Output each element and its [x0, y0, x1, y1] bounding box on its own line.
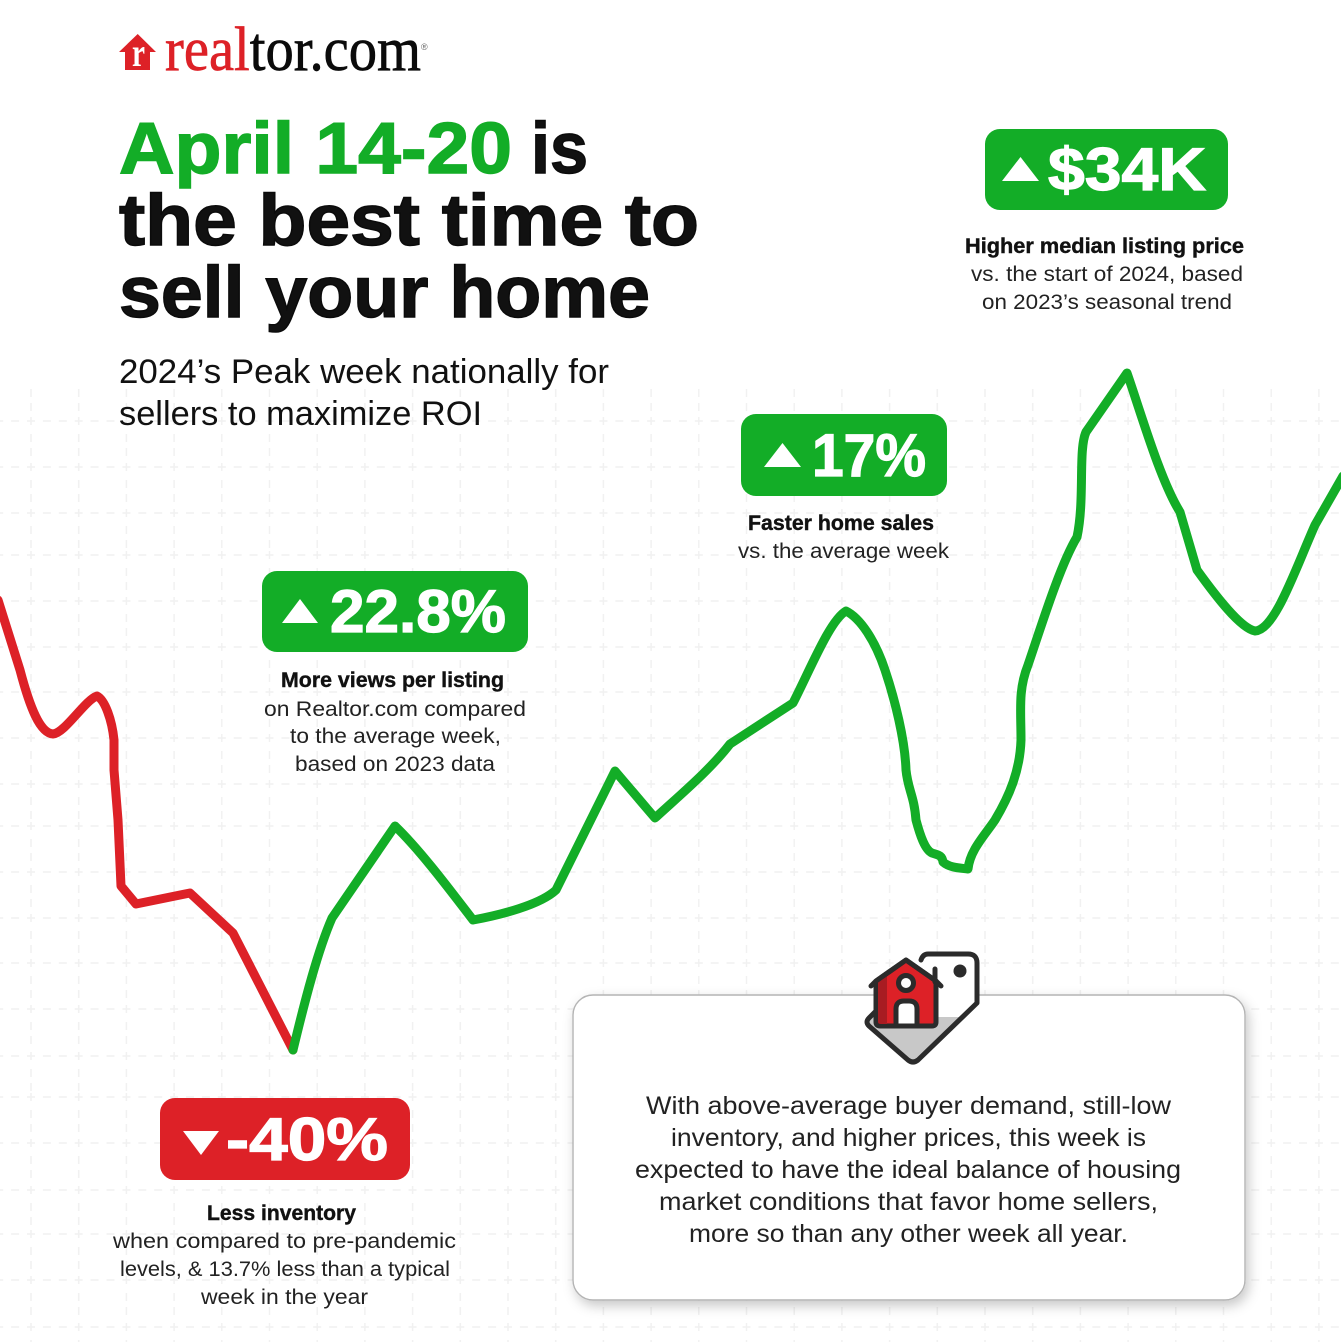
stat: -40% — [112, 1098, 456, 1309]
title — [119, 109, 699, 333]
caption: More views per listing — [281, 669, 504, 692]
caption — [965, 235, 1244, 314]
callout text: inventory, and higher prices, this week is — [671, 1124, 1146, 1152]
caption: on Realtor.com compared — [264, 698, 526, 721]
caption: based on 2023 data — [295, 753, 495, 776]
subtitle: sellers to maximize ROI — [119, 395, 482, 433]
badge: -40% — [226, 1106, 388, 1173]
title: is — [531, 109, 588, 189]
stat: $34K — [965, 129, 1244, 314]
line chart: seller trend — [0, 373, 1341, 1050]
caption: to the average week, — [290, 725, 501, 748]
badge — [160, 1098, 410, 1180]
icon: logo house: r — [132, 30, 145, 75]
caption: when compared to pre-pandemic — [112, 1230, 456, 1253]
caption — [112, 1202, 456, 1309]
title: the best time to — [119, 181, 699, 261]
callout text: more so than any other week all year. — [689, 1220, 1128, 1248]
badge — [741, 414, 947, 496]
caption: Faster home sales — [748, 512, 934, 535]
badge — [985, 129, 1228, 210]
red declining segment — [0, 600, 293, 1050]
caption: Higher median listing price — [965, 235, 1244, 258]
stat: 17% — [738, 414, 950, 563]
caption: vs. the average week — [738, 540, 950, 563]
title: April 14-20 — [119, 109, 512, 189]
panel: summary callout — [573, 954, 1245, 1300]
callout text: market conditions that favor home sellers, — [659, 1188, 1158, 1216]
caption: Less inventory — [207, 1202, 356, 1225]
caption — [264, 669, 526, 776]
subtitle: 2024’s Peak week nationally for — [119, 353, 609, 391]
subtitle — [119, 353, 609, 433]
callout text: With above-average buyer demand, still-low — [646, 1092, 1172, 1120]
caption: levels, & 13.7% less than a typical — [120, 1258, 450, 1281]
icon: house on price tag — [867, 954, 977, 1062]
card background — [573, 995, 1245, 1300]
caption: vs. the start of 2024, based — [971, 263, 1243, 286]
caption: on 2023’s seasonal trend — [982, 291, 1232, 314]
title: sell your home — [119, 253, 650, 333]
badge: 22.8% — [330, 578, 506, 645]
logo: realtor.com — [119, 16, 428, 84]
caption: week in the year — [200, 1286, 368, 1309]
callout text — [635, 1092, 1181, 1248]
logo: realtor.com: ® — [421, 42, 428, 52]
stat: 22.8% — [262, 571, 528, 776]
green rising segment — [293, 373, 1341, 1050]
badge — [262, 571, 528, 652]
callout text: expected to have the ideal balance of housing — [635, 1156, 1181, 1184]
badge: 17% — [812, 422, 926, 489]
badge: $34K — [1048, 136, 1206, 203]
logo wordmark: realtor.com — [165, 16, 421, 84]
caption — [738, 512, 950, 563]
icon: logo house — [119, 30, 156, 75]
